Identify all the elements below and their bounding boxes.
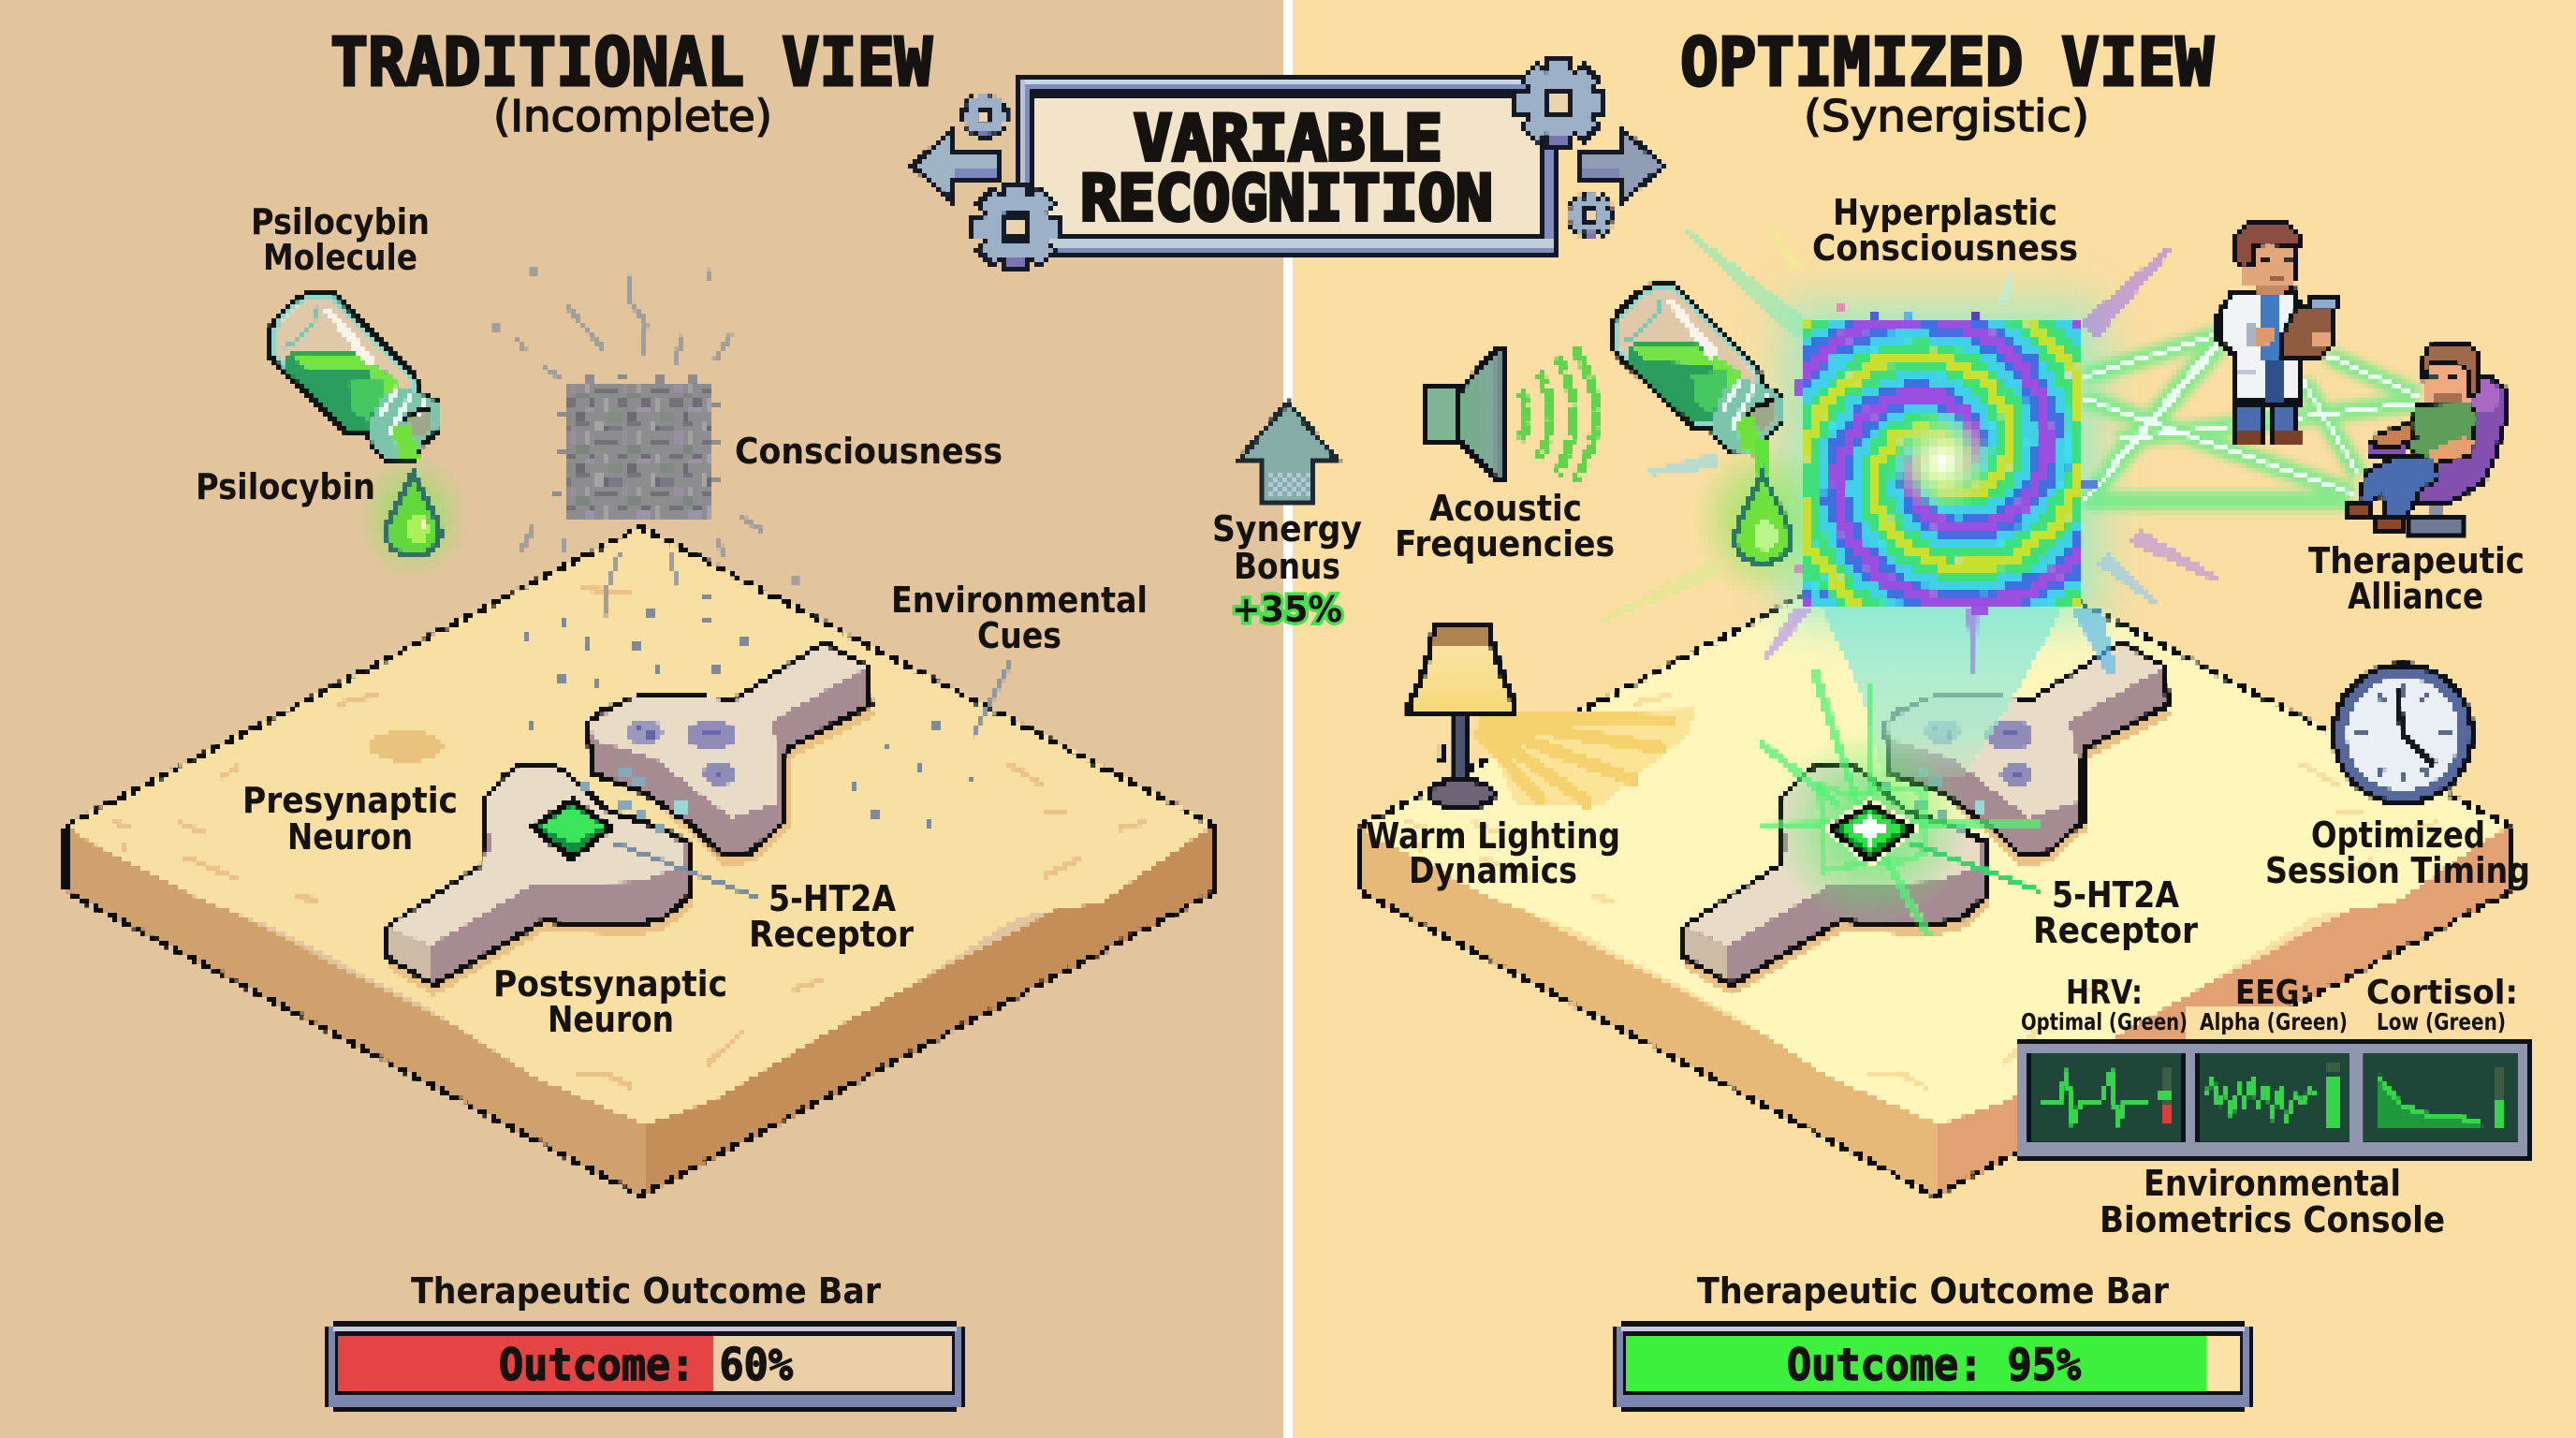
- label: psilocybin molecule: Psilocybin: [251, 201, 430, 242]
- illustration: traditional artwork: [66, 267, 1216, 1196]
- outcome bar: 95%: [1613, 1270, 2253, 1412]
- leader line: receptor: [1910, 843, 2041, 891]
- label: acoustic frequencies: [1395, 488, 1615, 565]
- background patch behind biometric sublabels: [2188, 1007, 2365, 1041]
- label: environmental cues: Cues: [977, 615, 1061, 656]
- chart: EEG: [2206, 1063, 2340, 1126]
- background: optimized side: [1293, 0, 2576, 1438]
- leader line: receptor: [613, 843, 756, 897]
- glow around spiral: [1783, 301, 2101, 624]
- label: 5-HT2A receptor: 5-HT2A: [2052, 874, 2180, 916]
- synergy text: Synergy: [1212, 508, 1362, 550]
- left arrow: [913, 130, 998, 201]
- gear: top left: [961, 93, 1008, 139]
- label: cortisol: Low (Green): [2377, 1008, 2506, 1035]
- synergy text: Bonus: [1234, 546, 1340, 587]
- title: optimized view: OPTIMIZED VIEW: [1680, 23, 2214, 101]
- label: acoustic frequencies: Acoustic: [1429, 488, 1582, 529]
- console panel: [2015, 1040, 2531, 1159]
- label: EEG: [2200, 974, 2348, 1035]
- illustration: banner frame and gears: [913, 57, 1664, 273]
- neuron pair: [388, 643, 874, 996]
- label: 5-HT2A receptor: Receptor: [749, 914, 914, 955]
- label: presynaptic neuron: Neuron: [287, 816, 413, 858]
- label: cortisol: Cortisol:: [2366, 974, 2518, 1012]
- right arrow: [1580, 130, 1664, 201]
- label: 5-HT2A receptor: [749, 878, 914, 955]
- outcome bar: 60%: [325, 1270, 965, 1412]
- isometric platform: [66, 527, 1216, 1196]
- therapeutic alliance network: [2085, 335, 2418, 501]
- hyperplastic consciousness spiral: [1794, 303, 2098, 615]
- label: postsynaptic neuron: Neuron: [548, 999, 674, 1040]
- label: psilocybin: Psilocybin: [196, 466, 375, 507]
- label: HRV: [2021, 974, 2188, 1035]
- label: psilocybin molecule: Molecule: [263, 237, 417, 278]
- callout: synergy bonus: [1212, 403, 1362, 630]
- light beam from spiral: [1821, 606, 2064, 775]
- label: warm lighting dynamics: [1366, 815, 1620, 891]
- panel: traditional view: [66, 23, 1216, 1412]
- banner frame: [1016, 76, 1559, 257]
- synergy text: +35%: [1232, 589, 1342, 630]
- label: EEG: EEG:: [2235, 974, 2311, 1012]
- label: therapeutic alliance: [2308, 540, 2525, 617]
- label: hyperplastic consciousness: [1812, 192, 2078, 269]
- label: warm lighting dynamics: Warm Lighting: [1366, 815, 1620, 857]
- label: optimized session timing: Optimized: [2311, 814, 2485, 856]
- label: optimized session timing: Session Timing: [2265, 850, 2530, 891]
- label: therapeutic alliance: Therapeutic: [2308, 540, 2525, 581]
- outcome bar: 95%: Therapeutic Outcome Bar: [1697, 1270, 2169, 1312]
- synergy text: [1212, 508, 1362, 630]
- title: optimized view: (Synergistic): [1804, 91, 2089, 141]
- label: consciousness: Consciousness: [735, 431, 1003, 472]
- label: 5-HT2A receptor: [2033, 874, 2198, 951]
- outcome bar: 95%: Outcome: 95%: [1787, 1340, 2081, 1391]
- doctor: [2218, 222, 2337, 445]
- label: 5-HT2A receptor: Receptor: [2033, 910, 2198, 951]
- label: HRV: Optimal (Green): [2021, 1008, 2188, 1035]
- chart: cortisol: [2377, 1065, 2504, 1128]
- label: 5-HT2A receptor: 5-HT2A: [768, 878, 897, 919]
- label: environmental biometrics console: Environmental: [2144, 1163, 2401, 1204]
- label: psilocybin molecule: [251, 201, 430, 278]
- label: postsynaptic neuron: Postsynaptic: [493, 963, 727, 1005]
- banner: variable recognition: [913, 57, 1664, 273]
- psilocybin drop: [1692, 440, 1833, 599]
- title: optimized view: [1680, 23, 2214, 141]
- label: cortisol: [2366, 974, 2518, 1035]
- background: traditional side: [0, 0, 1283, 1438]
- warm light fan: [1474, 709, 1694, 806]
- label: hyperplastic consciousness: Consciousness: [1812, 227, 2078, 269]
- label: acoustic frequencies: Frequencies: [1395, 523, 1615, 565]
- patient: [2348, 344, 2505, 534]
- label: environmental biometrics console: Biometrics Console: [2100, 1199, 2445, 1240]
- center divider: [1283, 0, 1293, 1438]
- title: traditional view: [330, 23, 932, 141]
- label: HRV: HRV:: [2066, 974, 2143, 1012]
- chart: HRV: [2040, 1065, 2173, 1125]
- banner title: VARIABLE: [1134, 102, 1442, 176]
- title: traditional view: (Incomplete): [493, 91, 772, 141]
- label: therapeutic alliance: Alliance: [2348, 576, 2483, 617]
- banner title: [1080, 102, 1493, 236]
- consciousness noise block: [496, 267, 796, 618]
- label: postsynaptic neuron: [493, 963, 727, 1040]
- lamp: [1410, 625, 1515, 808]
- label: hyperplastic consciousness: Hyperplastic: [1833, 192, 2057, 233]
- isometric platform: [1360, 527, 2510, 1196]
- psilocybin bottle: [270, 292, 438, 461]
- outcome bar: 60%: Outcome: 60%: [499, 1340, 793, 1391]
- neuron pair: [1685, 643, 2172, 996]
- bottle: [1613, 285, 1781, 453]
- outcome bar: 60%: Therapeutic Outcome Bar: [411, 1270, 881, 1312]
- gear: bottom left: [971, 182, 1062, 273]
- speaker: [1424, 348, 1506, 481]
- label: presynaptic neuron: [242, 780, 458, 858]
- label: presynaptic neuron: Presynaptic: [242, 780, 458, 821]
- label: warm lighting dynamics: Dynamics: [1409, 850, 1577, 891]
- gear: top right: [1514, 57, 1605, 149]
- serotonin receptor burst: [1760, 668, 2041, 936]
- sound waves: [1520, 348, 1596, 481]
- leader line: environmental cues: [973, 663, 1010, 737]
- label: environmental cues: Environmental: [891, 580, 1148, 621]
- energy rays: [1600, 224, 2220, 676]
- icon: up arrow: [1240, 403, 1336, 501]
- label: environmental biometrics console: [2100, 1163, 2445, 1240]
- title: traditional view: TRADITIONAL VIEW: [330, 23, 932, 101]
- clock: [2331, 662, 2475, 806]
- gear: bottom right: [1567, 192, 1614, 239]
- illustration: optimized platform and neurons: [1360, 222, 2531, 1196]
- label: environmental cues: [891, 580, 1148, 656]
- scattered particles: [523, 593, 973, 829]
- psilocybin drop: [357, 453, 469, 580]
- panel: optimized view: [1360, 23, 2531, 1412]
- banner title: RECOGNITION: [1080, 162, 1493, 236]
- label: optimized session timing: [2265, 814, 2530, 891]
- serotonin receptor diamond: [533, 800, 611, 858]
- label: EEG: Alpha (Green): [2200, 1008, 2348, 1035]
